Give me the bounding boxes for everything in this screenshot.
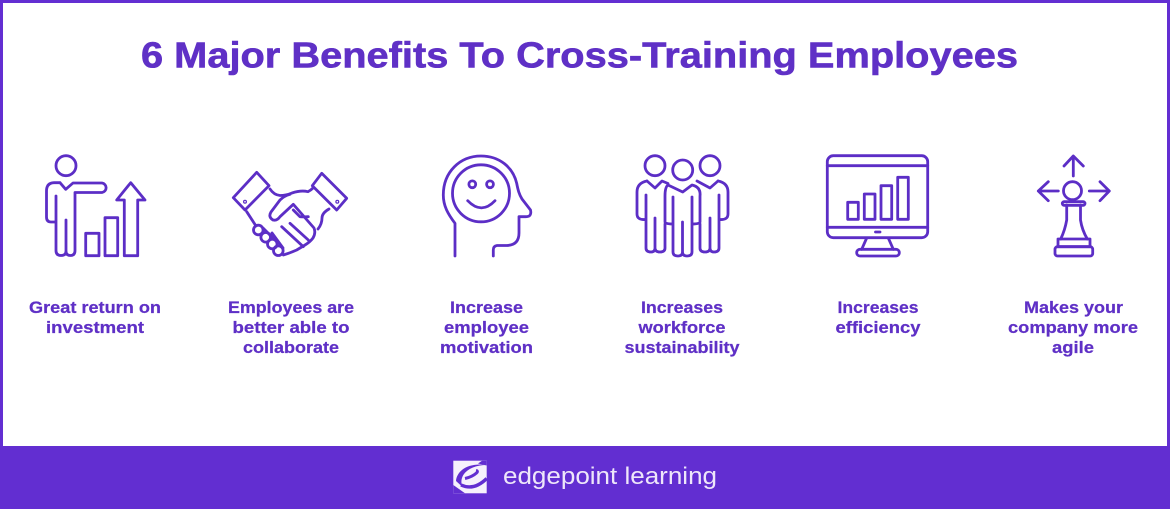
label: Increases xyxy=(838,298,918,317)
label: motivation xyxy=(440,338,533,357)
label: sustainability xyxy=(624,338,740,357)
label xyxy=(624,298,740,357)
label: Great return on xyxy=(29,298,161,317)
benefit 1: return on investment xyxy=(29,156,161,337)
icon: person pointing at rising bars xyxy=(46,156,145,256)
label: Increases xyxy=(641,298,723,317)
label: Increase xyxy=(450,298,523,317)
label: efficiency xyxy=(836,318,921,337)
label xyxy=(1008,298,1138,357)
label xyxy=(440,298,533,357)
label: better able to xyxy=(232,318,350,337)
label xyxy=(29,298,161,337)
label: agile xyxy=(1052,338,1094,357)
title: 6 Major Benefits To Cross-Training Employees xyxy=(141,34,1018,76)
label: workforce xyxy=(637,318,726,337)
icon: monitor with bar chart xyxy=(827,156,928,256)
icon: smiling head xyxy=(443,156,531,256)
label xyxy=(228,298,354,357)
icon: three people xyxy=(637,156,728,256)
label: Employees are xyxy=(228,298,354,317)
label: collaborate xyxy=(243,338,339,357)
label: employee xyxy=(444,318,529,337)
label: investment xyxy=(46,318,144,337)
label: Makes your xyxy=(1024,298,1123,317)
label: company more xyxy=(1008,318,1138,337)
benefit 6: agility xyxy=(1008,156,1138,357)
benefit 5: efficiency xyxy=(827,156,928,337)
brand name: edgepoint learning xyxy=(503,463,717,490)
benefit 4: workforce sustainability xyxy=(624,156,740,357)
benefit 3: motivation xyxy=(440,156,533,357)
icon: edgepoint logo xyxy=(453,461,487,493)
icon: chess pawn with arrows xyxy=(1038,156,1109,256)
benefit 2: collaboration xyxy=(228,172,354,357)
label xyxy=(836,298,921,337)
footer band xyxy=(0,446,1170,509)
icon: handshake xyxy=(233,172,347,256)
